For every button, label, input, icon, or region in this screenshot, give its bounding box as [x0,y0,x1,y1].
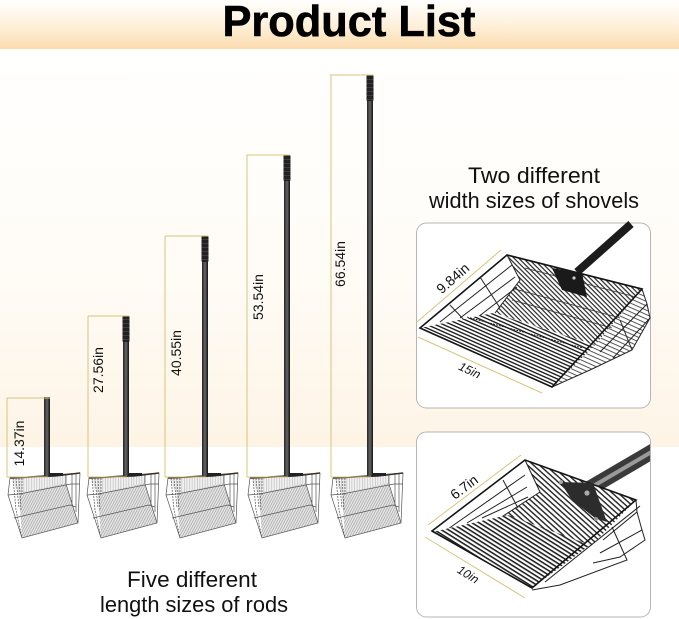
shovel 66.54in [330,75,403,538]
floor [432,515,590,588]
panel: five rod lengths [7,75,403,538]
shovel 14.37in [7,397,80,538]
shovel 40.55in: 40.55in [168,330,184,376]
caption: rods [100,567,288,617]
dimension 15in [418,337,542,393]
shovel 27.56in [87,316,159,538]
dimension 15in: 15in [456,359,483,382]
title banner [0,0,679,49]
frame [432,460,636,588]
dimension 6.7in [428,455,521,525]
dimension 6.7in: 6.7in [447,471,481,503]
floor [420,313,595,387]
shovel 53.54in [247,155,320,538]
wires [440,255,650,387]
shovel 27.56in: 27.56in [90,347,106,393]
back wall [500,460,636,547]
panel: 15in wide shovel [416,223,650,408]
panel: 10in wide shovel [416,432,660,617]
rod [590,447,660,488]
frame [420,255,642,387]
caption: shovels: Two different [468,163,600,188]
wires [448,460,645,590]
caption: shovels [428,163,639,213]
side lobe [552,289,650,387]
caption: rods: length sizes of rods [100,592,288,617]
dimension 9.84in [417,250,501,322]
caption: shovels: width sizes of shovels [428,188,639,213]
shovel 53.54in: 53.54in [250,274,266,320]
shovel 66.54in: 66.54in [332,241,348,287]
dimension 10in [425,537,525,598]
shovel 40.55in [165,236,238,538]
dimension 10in: 10in [455,563,482,587]
plate [552,268,587,297]
caption: rods: Five different [127,567,257,592]
shovel 14.37in: 14.37in [11,421,27,466]
rod [577,224,631,272]
plate [560,482,607,522]
back wall [495,255,642,345]
dimension 9.84in: 9.84in [433,260,472,297]
